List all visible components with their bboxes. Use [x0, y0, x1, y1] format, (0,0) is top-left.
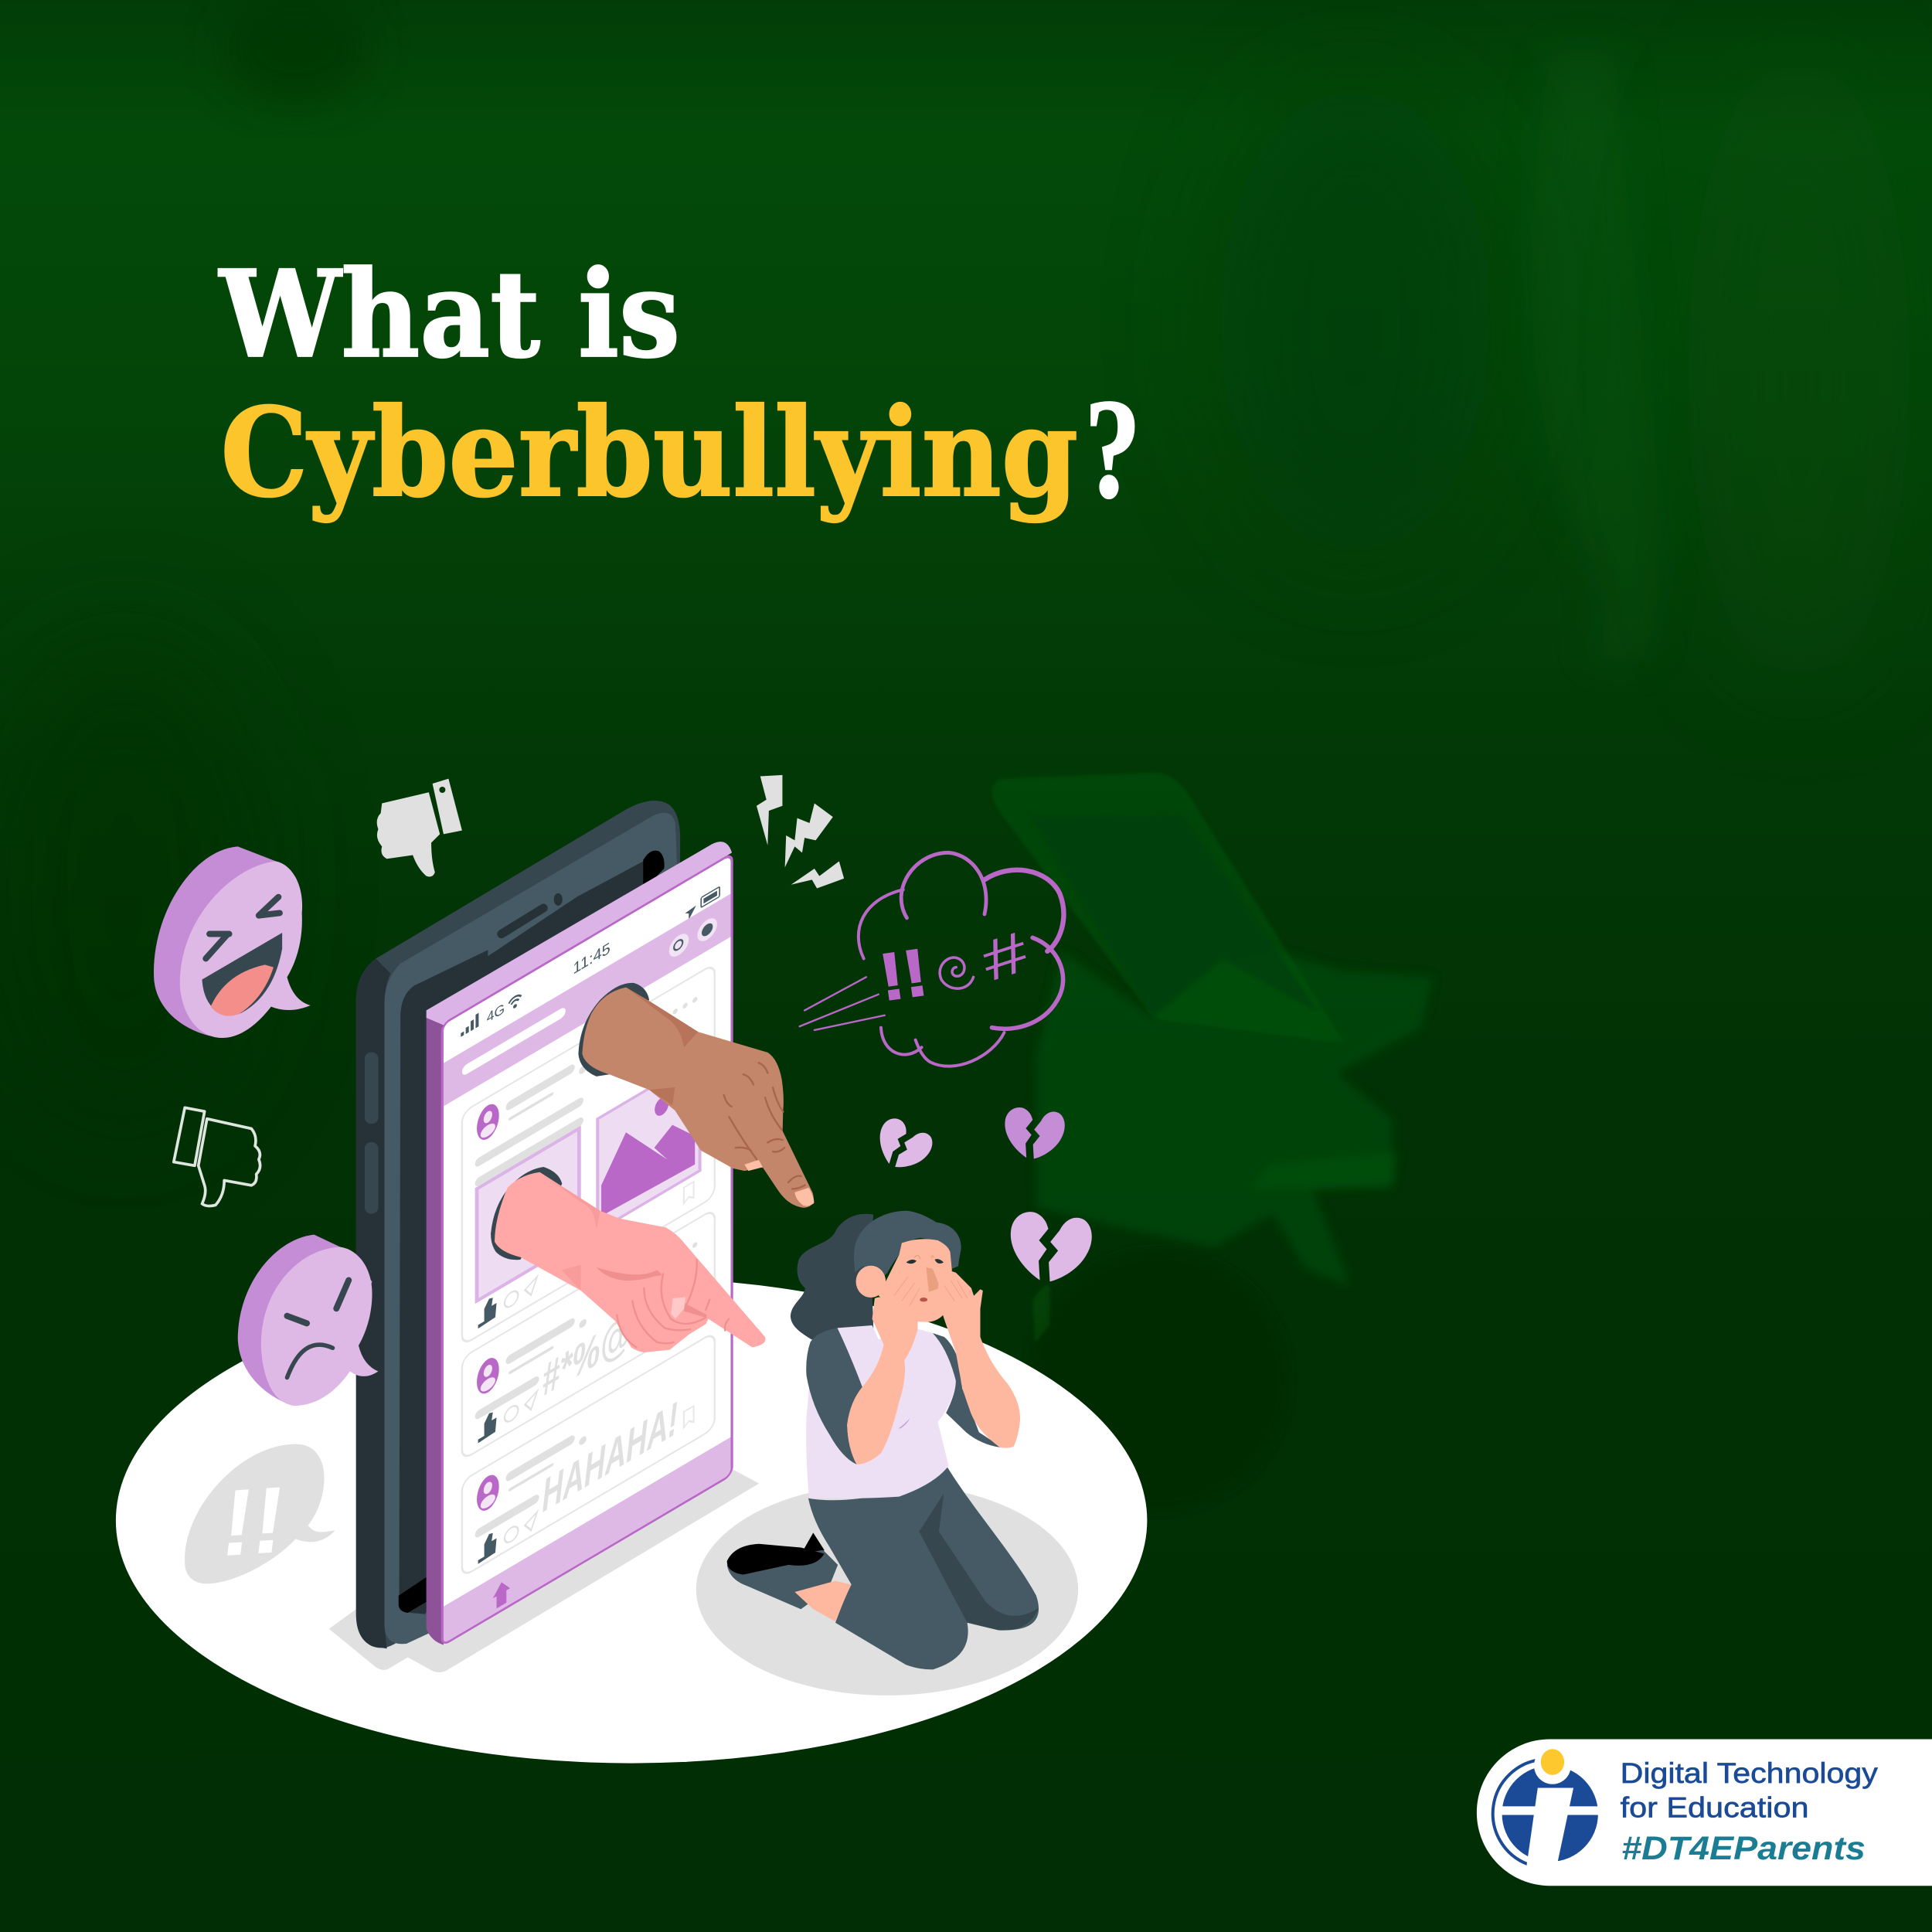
- black shoe: [727, 1544, 825, 1575]
- title: [218, 245, 1141, 529]
- angry brows: [287, 1281, 349, 1323]
- icon: broken heart small left: [869, 1114, 937, 1178]
- text: abusive symbols: #*%@: [543, 1305, 631, 1406]
- logo text: Digital Technology: [1621, 1757, 1879, 1789]
- icon: broken heart top right: [1001, 1105, 1066, 1162]
- pants fold: [919, 1493, 1039, 1631]
- mouth: [202, 933, 282, 1015]
- speed lines: [800, 977, 885, 1030]
- earpiece: [502, 908, 543, 934]
- mouth: [920, 1298, 927, 1301]
- title line 2: Cyberbullying: [220, 382, 1078, 525]
- brown pointing hand: [578, 983, 814, 1208]
- lower leg and foot: [727, 1550, 838, 1609]
- title question mark: ?: [1084, 370, 1141, 529]
- icon: filled thumbs down: [377, 779, 462, 877]
- status icons: [461, 871, 719, 1054]
- header band: [444, 893, 730, 1106]
- right image frame: [597, 1059, 700, 1231]
- menu dots: [673, 996, 697, 1015]
- right sleeve: [933, 1333, 1002, 1447]
- ghost hand: [1036, 951, 1433, 1285]
- title line 1: What is: [218, 245, 680, 385]
- logo mark: [1493, 1747, 1600, 1866]
- frown: [287, 1345, 332, 1378]
- icon: laughing speech bubble: [154, 846, 311, 1038]
- eyes: [907, 1260, 943, 1264]
- icon: lightning bolts: [757, 775, 844, 889]
- finger lines: [894, 1277, 968, 1306]
- girl crying: [727, 1211, 1039, 1669]
- post card 1: [462, 964, 715, 1345]
- right hand and arm: [938, 1265, 1020, 1448]
- search bar: [462, 1006, 566, 1077]
- search and message buttons: [669, 913, 717, 962]
- shirt: [806, 1325, 956, 1498]
- post card 3: [462, 1332, 715, 1577]
- laughing eyes: [206, 897, 280, 958]
- icon: outline thumbs down: [174, 1107, 260, 1206]
- phone screen side edge: [427, 842, 732, 1645]
- icon: grey exclamation speech bubble: [185, 1444, 335, 1583]
- ear: [856, 1266, 886, 1298]
- text: HAHAHA: HAHAHA!: [543, 1391, 678, 1522]
- post card 2: [462, 1209, 715, 1460]
- swear symbols: !!: [875, 935, 932, 1015]
- tongue: [211, 964, 274, 1016]
- left sleeve: [806, 1328, 862, 1464]
- icon: broken heart large: [1005, 1209, 1094, 1287]
- status icons: 11:45: [573, 938, 611, 978]
- card 1 actions: [478, 1178, 694, 1328]
- status icons: 4G: [487, 1001, 505, 1026]
- logo text: #DT4EParents: [1621, 1830, 1866, 1867]
- brows: [914, 1256, 934, 1259]
- shirt fold: [899, 1418, 910, 1428]
- ghost phone: [992, 773, 1343, 1041]
- icon: grey exclamation speech bubble: !!: [218, 1467, 287, 1576]
- pink pointing hand: [491, 1167, 765, 1352]
- face: [879, 1239, 952, 1322]
- swear symbols: #: [974, 920, 1036, 994]
- image mountains and sun: [601, 1095, 695, 1216]
- phone body: [356, 801, 680, 1648]
- icon: angry cloud with symbols: [800, 852, 1063, 1066]
- logo text: [1621, 1757, 1879, 1867]
- logo panel: [1477, 1739, 1932, 1886]
- bottom bar with home icon: [444, 1437, 730, 1644]
- back shoe: [804, 1532, 825, 1563]
- side buttons: [363, 1051, 379, 1215]
- ankle: [794, 1581, 852, 1621]
- girl upper body: [791, 1211, 1020, 1498]
- front hair: [854, 1211, 961, 1277]
- left image: [477, 1128, 579, 1301]
- swear symbols: [875, 920, 1036, 1015]
- camera: [554, 893, 563, 906]
- icon: angry speech bubble: [238, 1235, 378, 1406]
- left hand and arm: [847, 1267, 923, 1464]
- white platform ellipse: [116, 1277, 1147, 1764]
- phone screen (isometric): [442, 854, 732, 1645]
- nose: [927, 1267, 940, 1292]
- pants: [808, 1468, 1039, 1669]
- platform shadows: [329, 1466, 1078, 1696]
- logo text: for Education: [1621, 1792, 1809, 1824]
- back hair: [791, 1214, 873, 1339]
